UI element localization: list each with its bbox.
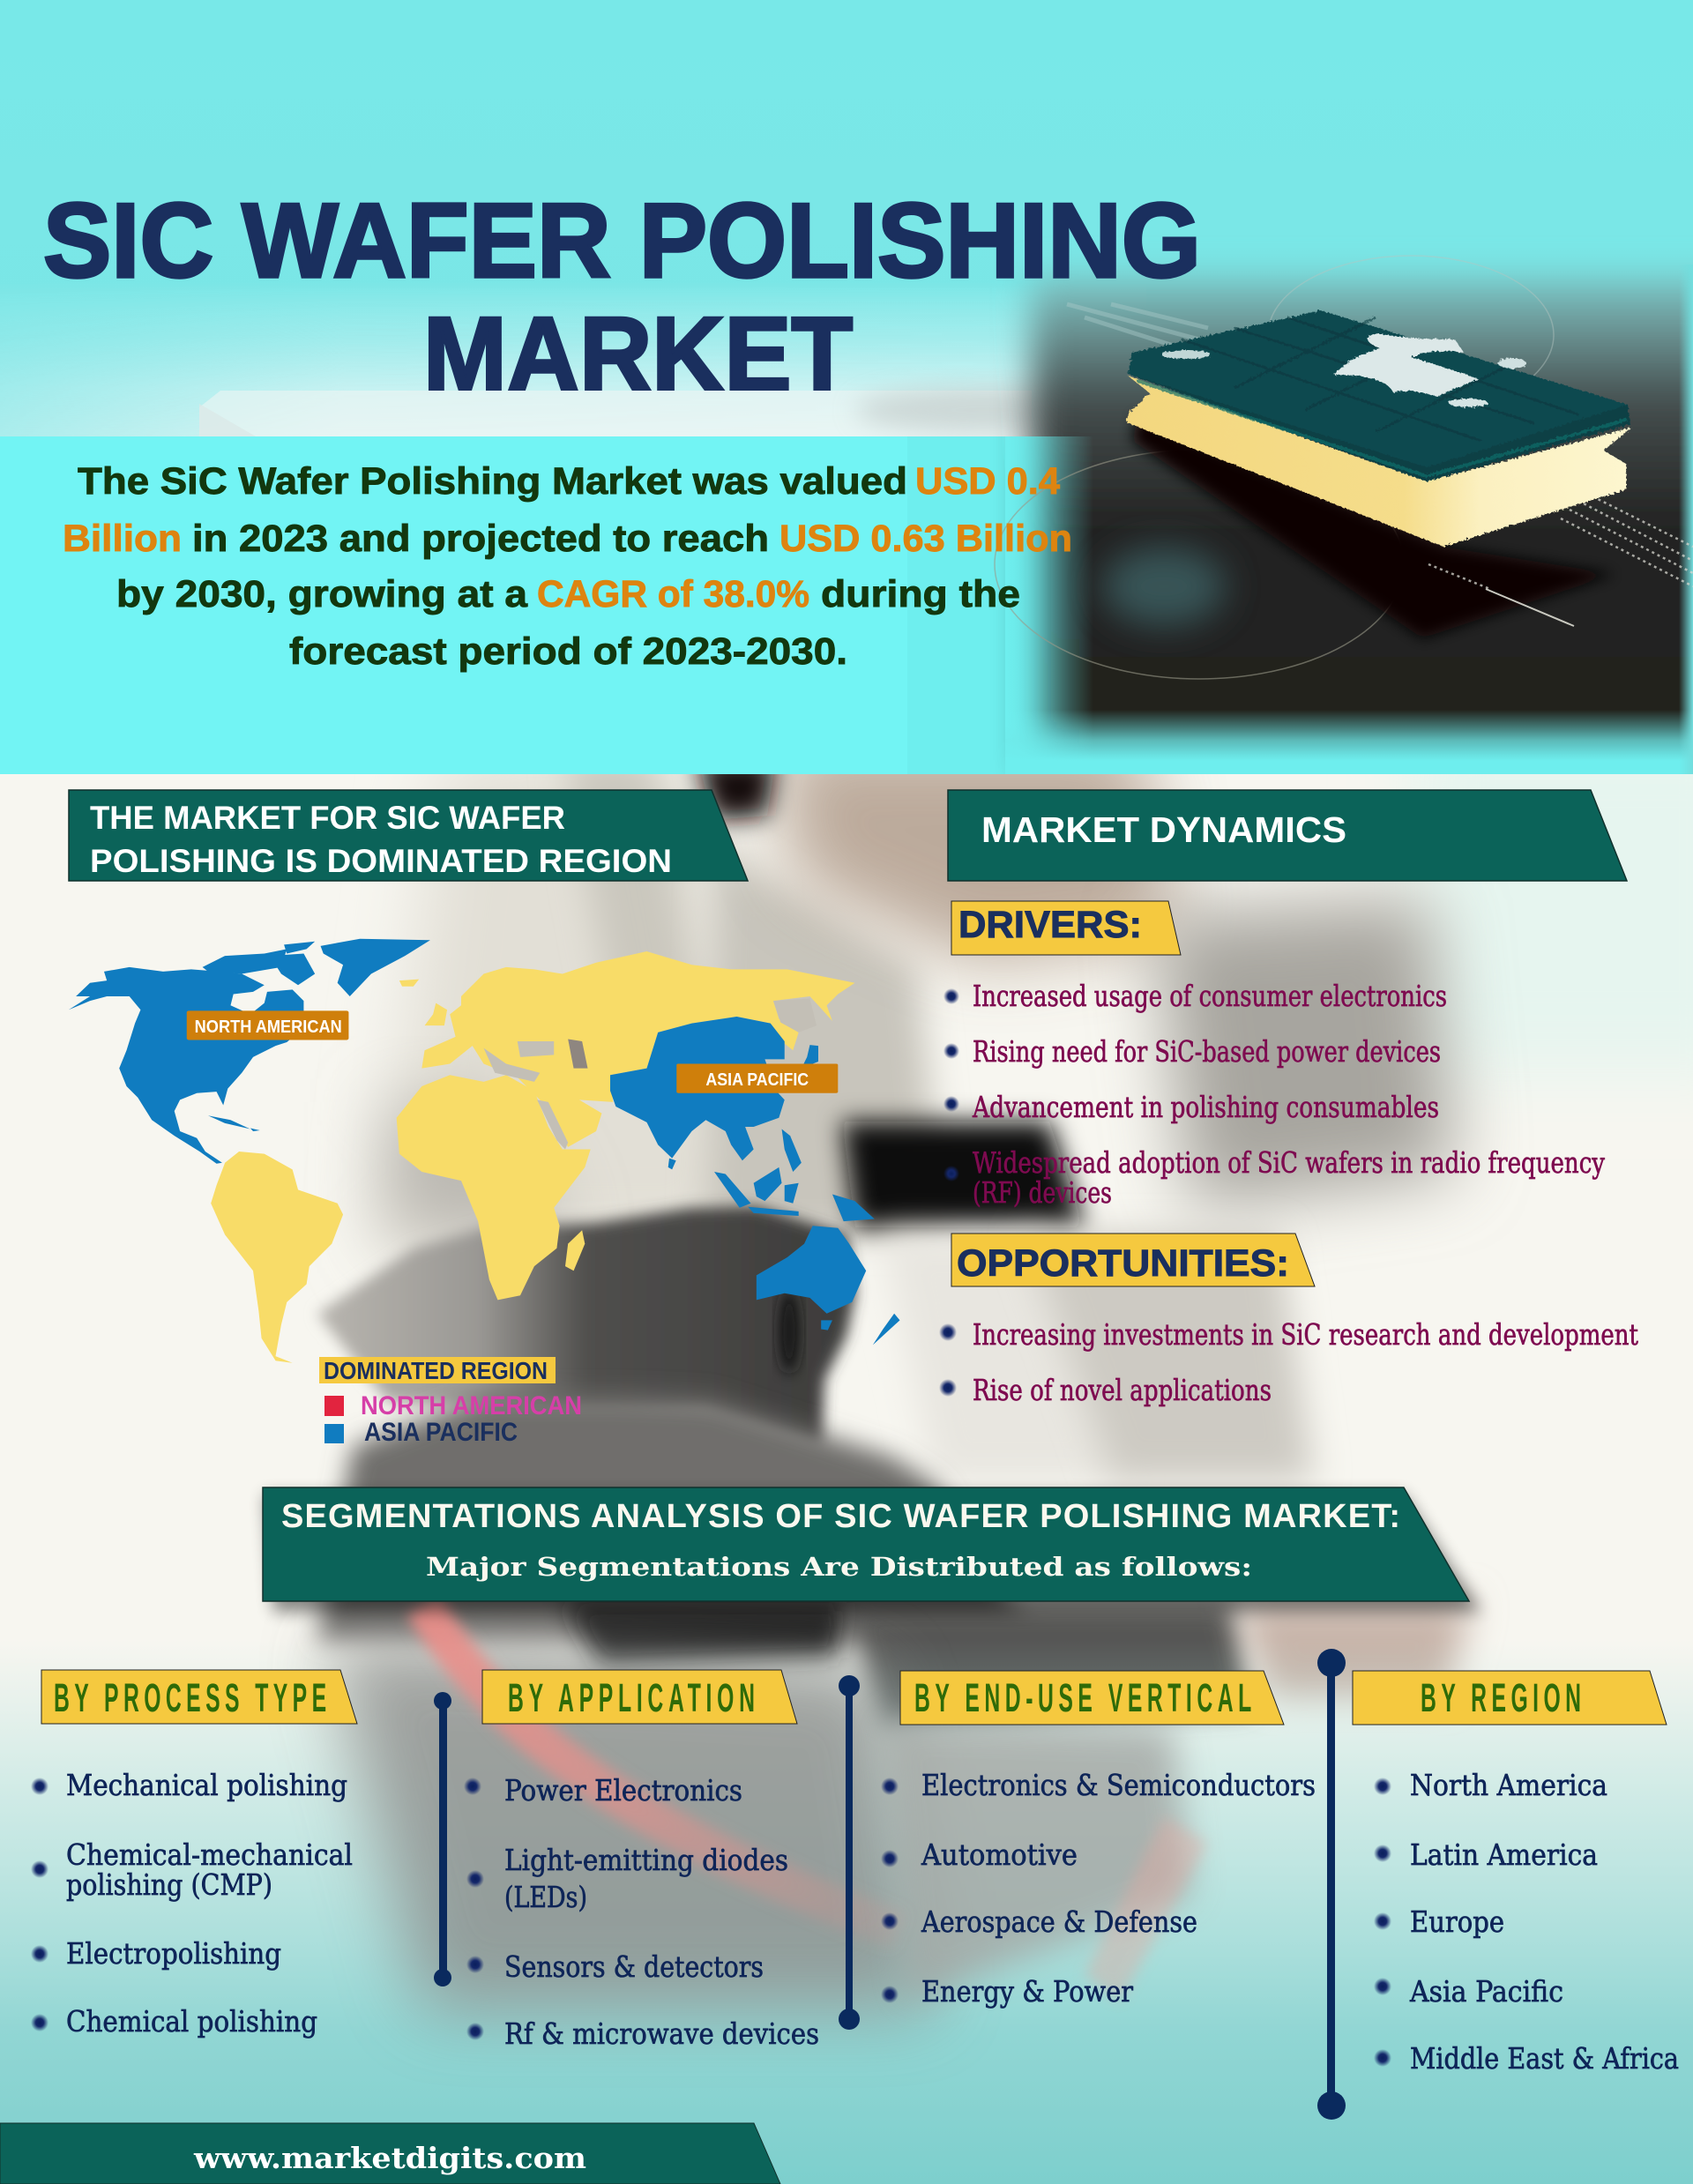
divider 1 bbox=[434, 1692, 451, 1986]
column 1: by process type: polishing (CMP) bbox=[66, 1867, 272, 1902]
divider 2 bbox=[839, 1675, 860, 2030]
map label: Asia Pacific bbox=[676, 1064, 838, 1093]
top header background bbox=[0, 0, 1693, 774]
market summary text: CAGR of 38.0% bbox=[537, 573, 809, 615]
column 2: by application: Rf & microwave devices bbox=[504, 2016, 819, 2051]
map: Asia Pacific blue bbox=[610, 1017, 899, 1345]
market summary text: Billion bbox=[63, 518, 182, 560]
column 2: by application: Power Electronics bbox=[504, 1773, 742, 1808]
column 4: by region: North America bbox=[1410, 1768, 1607, 1802]
column 1: by process type: Mechanical polishing bbox=[66, 1768, 347, 1802]
column 4: by region: BY REGION bbox=[1421, 1675, 1581, 1720]
market summary text: during the bbox=[821, 573, 1020, 615]
list: drivers: (RF) devices bbox=[973, 1175, 1112, 1210]
banner: segmentation analysis: SEGMENTATIONS ANALYSIS OF SIC WAFER POLISHING MARKET: bbox=[281, 1498, 1400, 1535]
column 3: by end-use vertical: BY END-USE VERTICAL bbox=[914, 1675, 1251, 1720]
divider 3 bbox=[1317, 1649, 1346, 2120]
map label: Asia Pacific: ASIA PACIFIC bbox=[705, 1069, 809, 1089]
list: drivers: Rising need for SiC-based power devices bbox=[973, 1034, 1441, 1069]
column 3: by end-use vertical: Electronics & Semiconductors bbox=[921, 1768, 1316, 1802]
column 4: by region: Europe bbox=[1410, 1904, 1504, 1939]
market summary text: USD 0.63 Billion bbox=[779, 518, 1072, 560]
legend: dominated region: NORTH AMERICAN bbox=[361, 1391, 582, 1420]
column 1: by process type: Chemical polishing bbox=[66, 2004, 317, 2039]
column 4: by region bbox=[1353, 1671, 1679, 2076]
map: yellow continents bbox=[211, 951, 854, 1363]
list: opportunities bbox=[939, 1317, 1638, 1407]
footer banner: website: www.marketdigits.com bbox=[193, 2141, 586, 2175]
market summary text: in 2023 and projected to reach bbox=[192, 518, 769, 560]
title: SIC WAFER POLISHING bbox=[43, 182, 1201, 300]
market summary text: The SiC Wafer Polishing Market was valued bbox=[78, 460, 907, 503]
column 1: by process type: Electropolishing bbox=[66, 1936, 281, 1971]
list: drivers: Increased usage of consumer electronics bbox=[973, 979, 1447, 1013]
map: grey countries bbox=[484, 999, 817, 1149]
list: drivers: Advancement in polishing consumables bbox=[972, 1090, 1439, 1124]
market summary text bbox=[63, 460, 1072, 673]
banner: segmentation analysis bbox=[263, 1487, 1481, 1612]
column 2: by application bbox=[464, 1670, 819, 2051]
market summary text: USD 0.4 bbox=[915, 460, 1060, 503]
legend: dominated region bbox=[319, 1357, 582, 1447]
map: Americas blue north bbox=[69, 939, 430, 1164]
list: drivers bbox=[943, 979, 1605, 1210]
column 3: by end-use vertical: Automotive bbox=[921, 1837, 1078, 1872]
banner: market dynamics: MARKET DYNAMICS bbox=[981, 809, 1346, 850]
column 1: by process type: BY PROCESS TYPE bbox=[54, 1675, 326, 1720]
market summary text: forecast period of 2023-2030. bbox=[289, 630, 847, 673]
column 4: by region: Latin America bbox=[1410, 1837, 1598, 1872]
world map bbox=[69, 939, 899, 1363]
column 2: by application: (LEDs) bbox=[504, 1880, 587, 1914]
lower photo background: polishing cloth and gloved hand bbox=[0, 723, 1693, 2184]
column 2: by application: Light-emitting diodes bbox=[504, 1843, 788, 1877]
banner: dominated region heading bbox=[69, 790, 748, 881]
banner: market dynamics bbox=[948, 790, 1627, 881]
heading: drivers bbox=[951, 901, 1181, 955]
legend: dominated region: ASIA PACIFIC bbox=[364, 1418, 518, 1447]
legend: dominated region: DOMINATED REGION bbox=[324, 1357, 548, 1384]
column 1: by process type: Chemical-mechanical bbox=[66, 1837, 353, 1872]
column 1: by process type bbox=[31, 1670, 357, 2039]
photo: sponge on dark hob bbox=[995, 256, 1693, 774]
column 2: by application: BY APPLICATION bbox=[508, 1675, 755, 1720]
column 2: by application: Sensors & detectors bbox=[504, 1949, 764, 1984]
column 4: by region: Asia Pacific bbox=[1409, 1974, 1563, 2009]
column 3: by end-use vertical bbox=[881, 1671, 1316, 2009]
heading: drivers: DRIVERS: bbox=[958, 904, 1142, 946]
banner: dominated region heading: THE MARKET FOR SIC WAFER bbox=[90, 800, 565, 836]
banner: segmentation analysis: Major Segmentations Are Distributed as follows: bbox=[426, 1552, 1252, 1582]
list: opportunities: Rise of novel applications bbox=[973, 1373, 1272, 1407]
map label: North American bbox=[187, 1010, 348, 1040]
title bbox=[44, 201, 1196, 391]
heading: opportunities: OPPORTUNITIES: bbox=[957, 1242, 1289, 1285]
title: MARKET bbox=[423, 295, 853, 414]
map label: North American: NORTH AMERICAN bbox=[195, 1016, 342, 1036]
footer banner: website bbox=[0, 2123, 780, 2184]
column 3: by end-use vertical: Aerospace & Defense bbox=[921, 1904, 1197, 1939]
column 3: by end-use vertical: Energy & Power bbox=[921, 1974, 1133, 2009]
banner: dominated region heading: POLISHING IS DOMINATED REGION bbox=[90, 843, 672, 879]
market summary text: by 2030, growing at a bbox=[116, 573, 528, 615]
